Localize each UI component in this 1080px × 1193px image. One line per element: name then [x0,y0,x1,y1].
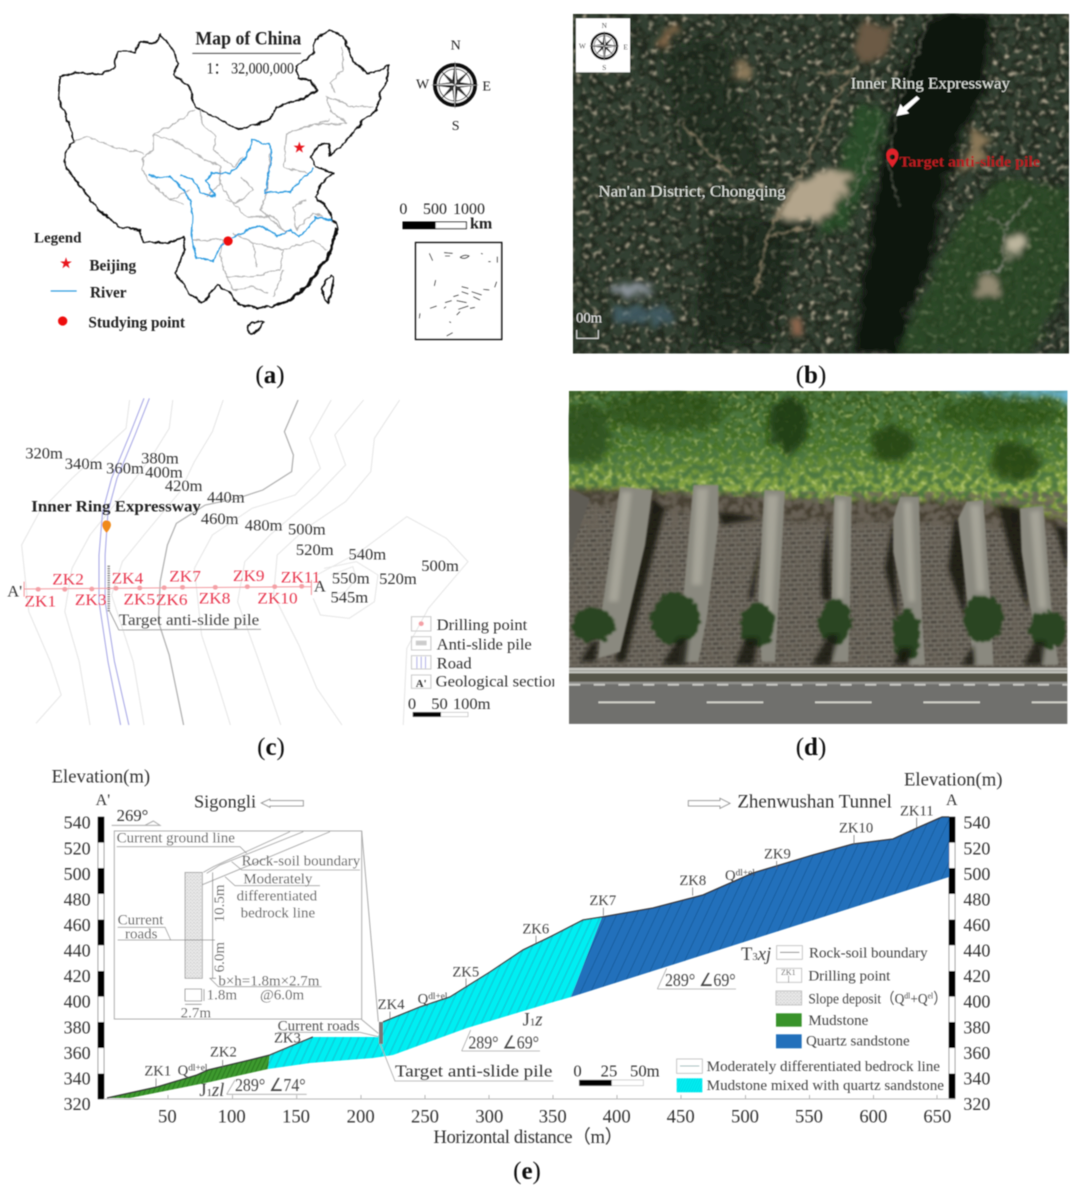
inset: anti-slide pile detail: Current ground line [117,830,235,846]
left elevation ticks: 540 [64,812,91,832]
label: target anti-slide pile: Target anti-slide pile [899,155,1041,171]
inset: anti-slide pile detail: 2.7m [181,1006,211,1022]
section legend: Rock-soil boundary [809,946,928,962]
scale bar: 50 [431,697,448,713]
borehole labels right: ZK10 [839,820,873,836]
drilling point labels: ZK3 [75,591,107,609]
borehole labels right: ZK9 [764,846,791,862]
map legend: Drilling point [437,618,528,634]
x tick labels right: 550 [795,1106,823,1127]
soil labels left: dl+el [428,992,448,1002]
strata attitude labels left: J1zl [199,1080,224,1101]
caption (b): (b) [796,362,826,389]
scale bar: 1000 [453,201,485,218]
x axis title: Horizontal distance（m） [433,1127,623,1148]
x tick labels right [539,1106,951,1127]
right elevation ticks [963,812,990,1114]
strata attitude labels right: T3xj [741,944,771,965]
section line with drilling points [24,580,311,597]
elevation labels: 520m [296,543,334,559]
scale bar: km [470,215,493,232]
borehole labels left: ZK3 [274,1030,301,1046]
x tick labels right: 400 [603,1106,631,1127]
elevation labels: 550m [332,571,370,587]
strata attitude labels right: 289° ∠69° [665,970,736,990]
legend: River [90,284,127,301]
panel c: contour map [7,398,560,725]
compass [416,38,491,134]
x tick labels right: 600 [859,1106,887,1127]
compass: N [451,38,461,53]
drilling point labels: ZK5 [123,590,155,608]
inset: anti-slide pile detail [114,830,378,1033]
section legend: Moderately differentiated bedrock line [707,1059,940,1075]
right elevation ticks: 480 [963,889,990,909]
scale bar [573,1062,660,1086]
drilling point labels: ZK9 [233,567,265,585]
left elevation ticks: 360 [64,1043,91,1063]
right elevation ticks: 440 [963,941,990,961]
scale bar: 00m [576,311,603,327]
compass: W [416,78,430,93]
x tick labels left: 50 [158,1106,177,1127]
scale bar: 0 [408,697,416,713]
right elevation ticks: 420 [963,966,990,986]
right elevation ticks: 380 [963,1017,990,1037]
icon: orange pin [102,520,111,533]
edge line [568,683,1068,686]
label A': A' [96,792,110,809]
compass box: N [602,21,608,30]
section legend: Mudstone mixed with quartz sandstone [707,1078,944,1094]
section legend: ZK1 [781,968,796,977]
inset: anti-slide pile detail: Rock-soil boundary [242,854,361,870]
anti-slide pile marker [105,566,112,612]
soil labels left: Q [178,1063,188,1079]
section legend: Quartz sandstone [806,1034,910,1050]
label: target anti-slide pile: Target anti-slide pile [395,1062,553,1081]
strata attitude labels left [199,1010,543,1101]
scale bar: 0 [573,1062,582,1081]
elevation labels: 360m [106,461,144,477]
left elevation ticks: 320 [64,1094,91,1114]
label: Inner Ring Expressway: Inner Ring Expressway [31,499,201,516]
label: Inner Ring Expressway: Inner Ring Expressway [851,75,1010,92]
inset: anti-slide pile detail: differentiated [237,888,318,904]
left elevation ticks: 520 [64,838,91,858]
strata attitude labels left: 289° ∠74° [235,1075,306,1095]
right elevation ticks: 520 [963,838,990,858]
right elevation ticks: 460 [963,915,990,935]
inset: anti-slide pile detail: bedrock line [241,906,315,922]
panel e: geological cross-section [52,766,1002,1148]
section labels: A' [7,584,22,601]
drilling point labels: ZK2 [52,570,84,588]
borehole labels right [589,804,934,916]
direction: Sigongli [194,792,303,812]
drilling point labels: ZK11 [281,568,320,586]
elevation labels: 320m [25,446,63,462]
y axis right [949,817,955,1099]
concrete piles [569,485,1058,665]
strata attitude labels left: J1z [523,1010,543,1031]
section labels [7,579,326,601]
caption (e): (e) [513,1158,541,1185]
strata attitude labels right [657,944,771,990]
scale bar: 0 [399,201,407,218]
x tick labels right: 350 [539,1106,567,1127]
borehole labels left: ZK1 [144,1064,171,1080]
caption (c): (c) [257,734,285,761]
map legend: Geological section [436,674,560,691]
caption (d): (d) [796,734,826,761]
x tick labels left: 100 [218,1106,246,1127]
drilling point labels: ZK6 [156,591,188,609]
scale bar: 500 [423,201,447,218]
compass: E [482,80,491,95]
orientation 269: 269° [117,806,148,825]
right elevation ticks: 360 [963,1043,990,1063]
scale bar [408,697,491,717]
x tick labels left: 150 [282,1106,310,1127]
x tick labels right: 650 [923,1106,951,1127]
left elevation ticks: 460 [64,915,91,935]
map title: Map of China [195,28,302,49]
elevation labels: 380m [141,451,179,467]
compass box: E [623,42,628,51]
x axis [104,1095,955,1099]
inset: south china sea islands [416,243,502,339]
lane markings [598,700,1068,704]
map title: 1： 32,000,000 [207,60,294,77]
panel b: satellite image [573,14,1069,353]
inset: anti-slide pile detail: 6.0m [212,942,228,972]
section legend: Drilling point [808,969,891,985]
icon: location pin [886,149,898,167]
legend: Legend [34,231,82,247]
label: target anti-slide pile [380,1043,553,1081]
hillside vegetation [558,387,1075,524]
section legend [677,946,947,1094]
x tick labels left: 300 [475,1106,503,1127]
right elevation ticks: 540 [963,812,990,832]
left elevation ticks: 440 [64,941,91,961]
elevation labels: 520m [379,572,417,588]
label: target anti-slide pile: Target anti-slide pile [119,613,259,629]
drilling point labels [24,567,320,611]
left elevation ticks [64,812,91,1114]
road [99,398,149,725]
inset: anti-slide pile detail: Moderately [243,871,313,887]
elevation labels: 500m [421,559,459,575]
section legend: +Q [910,991,928,1007]
inset: anti-slide pile detail: 1.8m [207,987,237,1003]
legend: Beijing [89,258,137,275]
target pile marker [379,1022,383,1044]
left axis title: Elevation(m) [52,766,150,787]
left elevation ticks: 340 [64,1068,91,1088]
compass: S [452,119,460,134]
map legend: Road [437,656,472,672]
mudstone layer [107,1055,270,1098]
x tick labels right: 500 [731,1106,759,1127]
soil labels left: Q [418,992,428,1008]
scale bar [399,201,493,232]
orientation 269 [112,806,160,825]
elevation labels: 400m [145,465,183,481]
elevation labels: 545m [330,590,369,606]
left elevation ticks: 400 [64,992,91,1012]
right elevation ticks: 320 [963,1094,990,1114]
y axis left [98,817,104,1099]
icon: study point [223,236,233,246]
borehole labels left: ZK4 [378,997,405,1013]
province boundaries [73,47,373,297]
label A: A [946,792,958,809]
right elevation ticks: 500 [963,864,990,884]
icon: Beijing star [294,142,305,153]
left elevation ticks: 500 [64,864,91,884]
borehole labels right: ZK8 [679,873,706,889]
drilling point labels: ZK10 [257,589,298,608]
inset: anti-slide pile detail: 10.5m [212,884,228,922]
arrow: expressway pointer [896,96,920,116]
elevation labels: 500m [288,522,326,538]
ground surface line [107,817,949,1098]
scale bar [576,311,603,338]
inset: anti-slide pile detail: Current [118,912,164,928]
section legend: Mudstone [808,1013,869,1029]
soil labels left: dl+el [188,1063,208,1073]
legend [34,231,186,331]
x tick labels left: 200 [347,1106,375,1127]
drilling point labels: ZK1 [24,592,56,611]
elevation labels: 480m [245,518,283,535]
inset: anti-slide pile detail: roads [125,926,158,942]
brick retaining wall [569,488,1067,668]
inset: anti-slide pile detail: b×h=1.8m×2.7m [218,974,320,990]
scale bar: 25 [601,1062,617,1081]
section legend: el [928,991,934,1001]
scale bar: 50m [630,1062,660,1081]
soil label right: dl+el [736,868,755,878]
elevation labels: 460m [201,512,239,528]
concrete pile shadows [615,498,1067,662]
label: district: Nan'an District, Chongqing [598,184,786,201]
direction: Zhenwushan Tunnel: Zhenwushan Tunnel [737,792,892,813]
left elevation ticks: 380 [64,1017,91,1037]
borehole labels right: ZK7 [589,893,616,909]
right axis title: Elevation(m) [904,770,1002,791]
leader: current roads: Current roads [278,1019,360,1035]
map legend [411,617,560,691]
mixed mudstone and sandstone layer [268,917,602,1069]
section labels: A [314,579,326,596]
strata attitude labels left: 289° ∠69° [468,1032,539,1052]
section legend: dl [904,991,911,1001]
drilling point labels: ZK8 [199,589,230,607]
right elevation ticks: 400 [963,992,990,1012]
drilling point labels: ZK4 [112,569,144,587]
china national outline [58,31,388,334]
scale bar: 100m [453,697,491,713]
quartz sandstone layer [571,817,949,997]
panel a: map of China [34,28,502,339]
left elevation ticks: 420 [64,966,91,986]
map title [192,28,302,77]
borehole labels right: ZK11 [900,804,934,820]
map legend: Anti-slide pile [437,637,532,653]
left elevation ticks: 480 [64,889,91,909]
yangtze and yellow rivers [148,140,332,262]
borehole labels left [144,921,549,1087]
map legend: A' [416,679,427,690]
contour lines [22,400,468,725]
soil labels left [178,992,448,1079]
x tick labels left: 250 [411,1106,439,1127]
inset: anti-slide pile detail: @6.0m [260,987,305,1003]
elevation labels: 540m [348,547,387,564]
soil label right: Q [725,868,736,884]
section legend: Slope deposit（Q [808,991,915,1007]
road base and guardrail [569,667,1067,724]
panel d: field photo of anti-slide piles [558,387,1075,724]
elevation labels: 440m [207,490,245,507]
borehole labels left: ZK2 [210,1045,237,1061]
caption (a): (a) [255,362,285,389]
elevation labels: 420m [165,479,203,495]
direction: Sigongli: Sigongli [194,792,256,812]
compass box [576,18,630,72]
elevation labels [25,446,459,606]
right elevation ticks: 340 [963,1068,990,1088]
borehole labels left: ZK6 [522,921,549,937]
compass box: W [579,42,586,51]
borehole labels left: ZK5 [452,965,479,981]
legend: Studying point [88,314,186,331]
elevation labels: 340m [65,457,103,473]
x tick labels left [158,1106,503,1127]
compass box: S [602,63,606,72]
x tick labels right: 450 [667,1106,695,1127]
drilling point labels: ZK7 [169,567,201,586]
bushes at wall foot [572,592,1067,660]
section legend: ） [933,990,947,1007]
